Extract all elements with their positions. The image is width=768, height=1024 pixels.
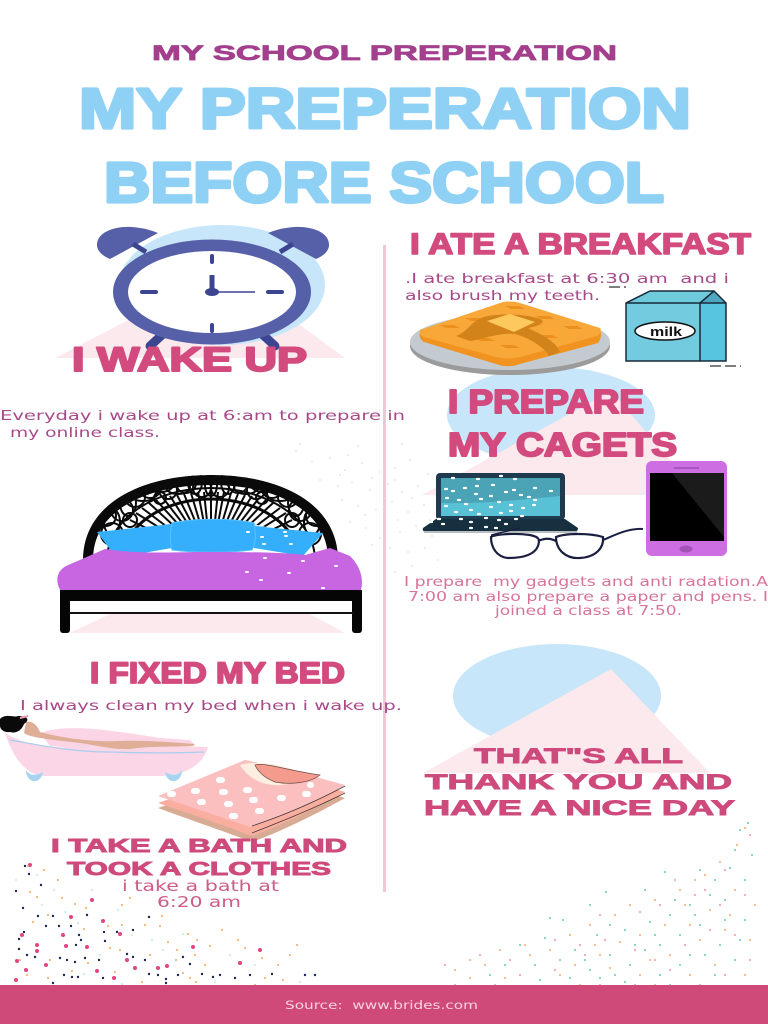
divider line [383,245,386,892]
heading: take a bath: TOOK A CLOTHES [67,858,331,879]
source credit: Source: www.brides.com [285,998,478,1012]
title: MY PREPERATION [79,77,691,141]
pink triangle backdrop [55,270,345,358]
icon: milk carton [609,287,741,366]
text: wake up description: my online class. [10,425,160,441]
icon: woman in bathtub [0,716,208,781]
heading: take a bath: I TAKE A BATH AND [51,835,347,856]
heading: I ate a breakfast: I ATE A BREAKFAST [410,228,751,261]
heading: I prepare my gagets: MY CAGETS [448,426,677,463]
pink triangle backdrop [423,669,710,773]
icon: glasses [491,528,643,558]
text: gadgets description: 7:00 am also prepare a paper and pens. I [408,589,768,605]
section: wake up [0,225,405,441]
text: breakfast description: also brush my teeth. [405,288,600,304]
section: bed [20,470,402,714]
heading: I fixed my bed: I FIXED MY BED [90,657,345,690]
text: bath description [122,877,279,911]
icon: smartphone [646,461,727,556]
blue circle backdrop [453,644,661,748]
text: breakfast description [405,271,729,304]
heading: I prepare my gagets [448,383,677,463]
milk label: milk [650,324,683,339]
heading: I wake up: I WAKE UP [72,341,307,379]
icon: alarm clock [97,227,329,346]
heading: I prepare my gagets: I PREPARE [448,383,644,420]
text: wake up description: Everyday i wake up at 6:am to prepare in [0,408,405,424]
confetti bottom left [16,865,315,985]
text: bed description: I always clean my bed when i wake up. [20,698,402,714]
icon: laptop [423,473,578,533]
pink triangle behind bed [70,614,345,633]
text: breakfast description: .I ate breakfast at 6:30 am and i [405,271,729,287]
footer bar [0,985,768,1024]
icon: folded clothes [158,760,345,842]
heading: take a bath [51,835,347,879]
closing message: THANK YOU AND [425,771,732,794]
confetti on laptop [430,476,552,528]
blue circle behind gadgets heading [447,367,655,463]
text: bath description: i take a bath at [122,877,279,895]
text: bath description: 6:20 am [157,893,241,911]
confetti on bed [246,532,337,588]
subtitle: MY SCHOOL PREPERATION [152,42,617,65]
icon: waffle on plate [410,302,610,375]
text: gadgets description: joined a class at 7:50. [494,603,682,619]
text: wake up description [0,408,405,441]
text: gadgets description: I prepare my gadgets and anti radation.A [404,574,768,590]
closing message: HAVE A NICE DAY [424,797,735,820]
pink triangle behind gadgets heading [422,391,700,495]
closing message: THAT"S ALL [474,745,683,768]
title [79,77,691,215]
icon: bed [57,470,362,633]
faint centre confetti [296,444,440,572]
closing message [424,745,735,820]
confetti bottom right [445,823,755,985]
section: breakfast [405,228,751,495]
title: BEFORE SCHOOL [104,151,664,215]
light blue circle backdrop [119,225,325,345]
section: bath and clothes [0,716,347,911]
section: thank you [423,644,735,820]
text: gadgets description [404,574,768,619]
section: gadgets [404,383,768,619]
